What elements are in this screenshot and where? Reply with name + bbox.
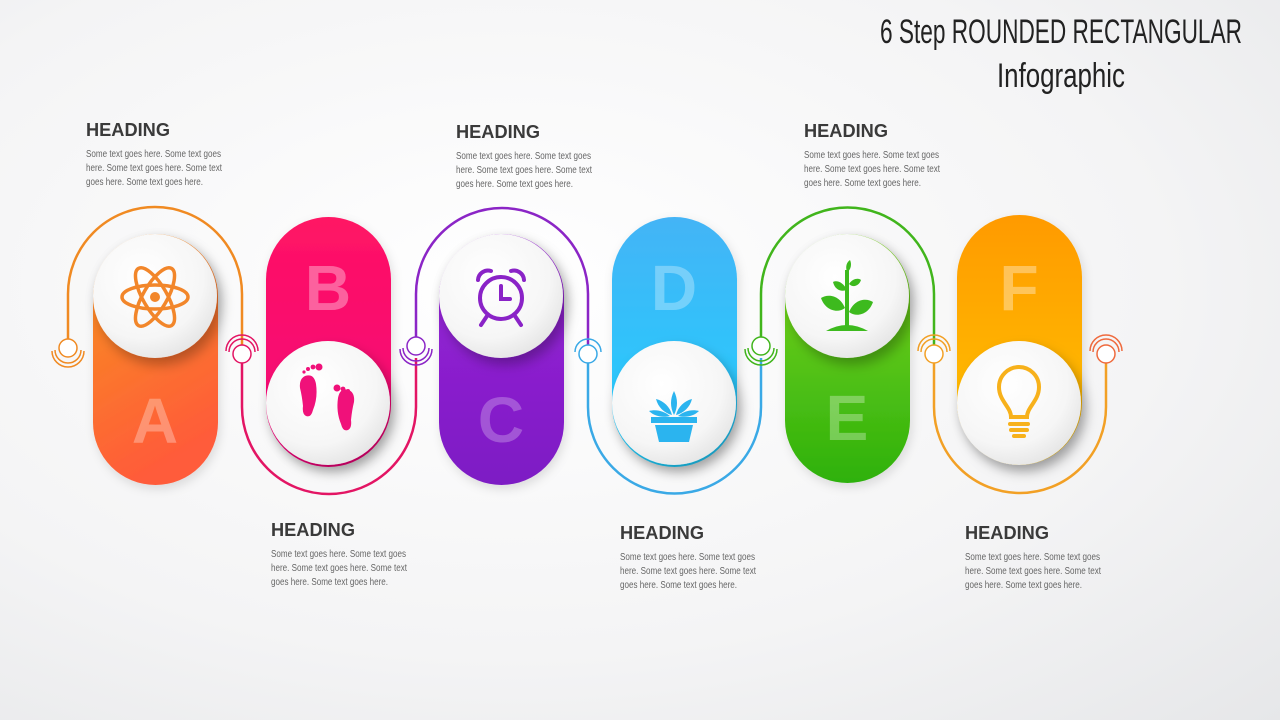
text block F: here. Some text goes here. Some text bbox=[965, 566, 1101, 577]
text block A: Some text goes here. Some text goes bbox=[86, 149, 221, 160]
text block E: HEADING bbox=[804, 121, 888, 141]
text block D: here. Some text goes here. Some text bbox=[620, 566, 756, 577]
text block A: here. Some text goes here. Some text bbox=[86, 163, 222, 174]
text block C: goes here. Some text goes here. bbox=[456, 179, 573, 190]
text block D: goes here. Some text goes here. bbox=[620, 580, 737, 591]
step D bbox=[612, 217, 737, 467]
text block C: HEADING bbox=[456, 122, 540, 142]
letter F: F bbox=[999, 252, 1039, 324]
text block B bbox=[271, 520, 407, 588]
text block C: Some text goes here. Some text goes bbox=[456, 151, 591, 162]
step C bbox=[439, 234, 564, 485]
letter E: E bbox=[826, 382, 868, 454]
connector line bbox=[68, 207, 1106, 494]
text block F bbox=[965, 523, 1101, 591]
text block C bbox=[456, 122, 592, 190]
text block F: goes here. Some text goes here. bbox=[965, 580, 1082, 591]
step A bbox=[93, 234, 218, 485]
icon: atom bbox=[122, 262, 188, 332]
step F bbox=[957, 215, 1082, 465]
letter B: B bbox=[305, 252, 351, 324]
text block E: Some text goes here. Some text goes bbox=[804, 150, 939, 161]
text block D: HEADING bbox=[620, 523, 704, 543]
letter A: A bbox=[132, 385, 178, 457]
text block B: goes here. Some text goes here. bbox=[271, 577, 388, 588]
step B bbox=[266, 217, 391, 467]
icon: sprout bbox=[821, 260, 873, 331]
title: Infographic bbox=[997, 57, 1125, 95]
junction rings bbox=[52, 335, 1122, 367]
text block E: goes here. Some text goes here. bbox=[804, 178, 921, 189]
text block F: HEADING bbox=[965, 523, 1049, 543]
icon: alarm clock bbox=[478, 271, 524, 325]
title bbox=[880, 13, 1242, 95]
text block B: Some text goes here. Some text goes bbox=[271, 549, 406, 560]
text block A bbox=[86, 120, 222, 188]
text block E bbox=[804, 121, 940, 189]
text block E: here. Some text goes here. Some text bbox=[804, 164, 940, 175]
text block B: HEADING bbox=[271, 520, 355, 540]
text block A: HEADING bbox=[86, 120, 170, 140]
icon: light bulb bbox=[999, 367, 1039, 436]
icon: potted plant bbox=[649, 391, 699, 442]
text block D: Some text goes here. Some text goes bbox=[620, 552, 755, 563]
letter C: C bbox=[478, 384, 524, 456]
letter D: D bbox=[651, 252, 697, 324]
text block B: here. Some text goes here. Some text bbox=[271, 563, 407, 574]
text block A: goes here. Some text goes here. bbox=[86, 177, 203, 188]
text block D bbox=[620, 523, 756, 591]
text block C: here. Some text goes here. Some text bbox=[456, 165, 592, 176]
step E bbox=[785, 234, 910, 483]
icon: footprints bbox=[300, 364, 354, 430]
text block F: Some text goes here. Some text goes bbox=[965, 552, 1100, 563]
